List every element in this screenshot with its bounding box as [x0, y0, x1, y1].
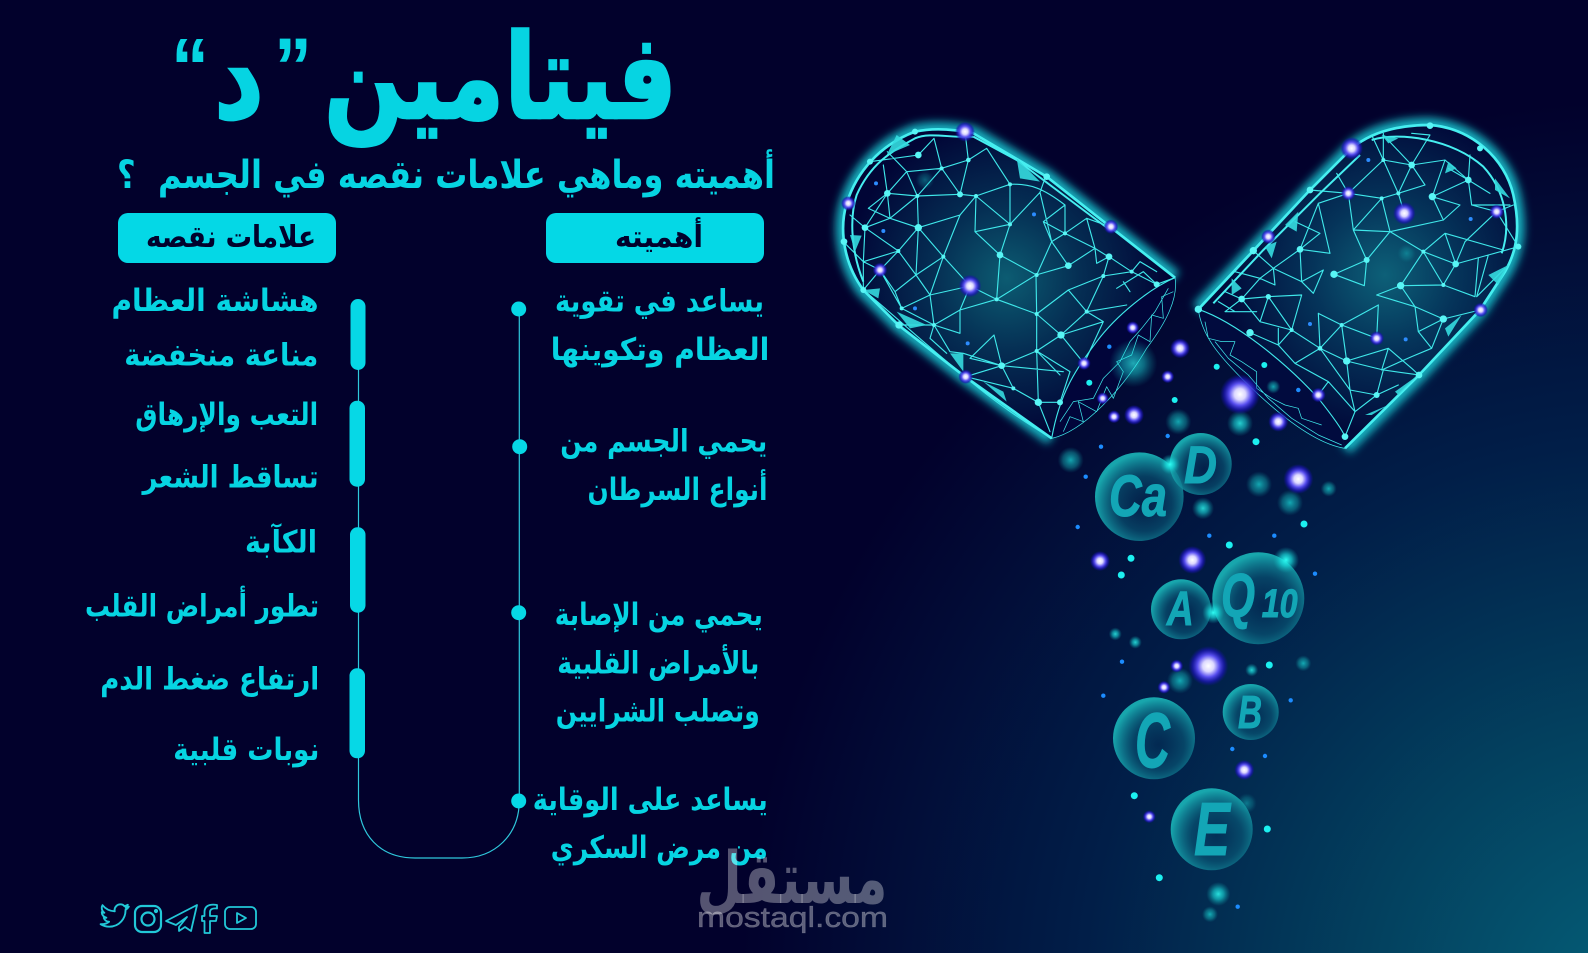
- deficiency signs list: نوبات قلبية: [173, 732, 319, 768]
- vitamin bubble: D: [1170, 433, 1232, 495]
- timeline connector: [358, 300, 527, 858]
- rim fragments: [850, 135, 1040, 402]
- capsule: right half: [1195, 122, 1521, 448]
- importance list: بالأمراض القلبية: [557, 643, 759, 681]
- vitamin bubble: B: [1223, 684, 1279, 740]
- icon: instagram: [135, 906, 161, 932]
- importance list: يساعد في تقوية: [555, 284, 764, 320]
- importance list: وتصلب الشرايين: [556, 694, 760, 730]
- button: importance: [546, 213, 764, 263]
- deficiency signs list: التعب والإرهاق: [135, 397, 318, 433]
- deficiency signs list: [85, 283, 319, 768]
- title: ”: [274, 22, 312, 113]
- capsule opening: [1198, 309, 1345, 448]
- icon: youtube: [225, 907, 256, 929]
- tiny blue dots: [1076, 344, 1317, 909]
- vitamin bubble: D: D: [1184, 436, 1217, 495]
- vitamin bubble: C: [1113, 696, 1195, 784]
- capsule rim: [1198, 125, 1517, 448]
- capsule opening: [1052, 278, 1176, 438]
- vitamin bubble: E: [1171, 787, 1253, 871]
- vitamin bubble: Q10: Q: [1221, 562, 1255, 631]
- timeline dots: [511, 302, 527, 808]
- mesh: [843, 132, 1175, 432]
- importance list: من مرض السكري: [551, 830, 768, 866]
- deficiency signs list: ارتفاع ضغط الدم: [100, 661, 319, 697]
- glowing nodes: [1261, 137, 1504, 402]
- importance list: يساعد على الوقاية: [533, 782, 768, 818]
- social icons: [101, 904, 256, 933]
- vitamin bubble: Q10: [1212, 552, 1304, 644]
- purple particles: [1090, 321, 1313, 823]
- vitamin bubble: E: E: [1194, 787, 1231, 871]
- button: deficiency signs: علامات نقصه: [146, 220, 316, 255]
- button: importance: أهميته: [615, 217, 703, 255]
- title: د: [214, 8, 264, 146]
- soft teal particles: [1058, 339, 1337, 922]
- mesh nodes: [841, 129, 1160, 406]
- deficiency signs list: تساقط الشعر: [141, 459, 318, 495]
- vitamin bubble: B: B: [1238, 686, 1262, 738]
- bright cyan dots: [1086, 362, 1308, 881]
- deficiency signs list: تطور أمراض القلب: [85, 586, 319, 625]
- bright contact glows: [1160, 454, 1299, 624]
- icon: facebook: [202, 905, 217, 933]
- title: [171, 8, 677, 147]
- vitamin bubble: A: [1151, 579, 1211, 639]
- importance list: [533, 284, 769, 866]
- mesh: [1218, 133, 1518, 437]
- button: deficiency signs: [118, 213, 336, 263]
- watermark: mostaql.com: [697, 902, 888, 934]
- title: فيتامين: [324, 8, 677, 147]
- watermark: مستقل: [696, 836, 888, 920]
- subtitle: أهميته وماهي علامات نقصه في الجسم ؟: [117, 149, 775, 198]
- glowing nodes: [841, 122, 1118, 404]
- rim fragments: [1232, 135, 1510, 415]
- deficiency signs list: مناعة منخفضة: [124, 338, 318, 374]
- icon: telegram: [166, 905, 197, 931]
- mesh nodes: [1195, 122, 1521, 440]
- vitamin bubble: Ca: Ca: [1109, 464, 1167, 529]
- capsule: left half: [841, 122, 1176, 438]
- icon: twitter: [101, 904, 129, 927]
- capsule rim: [843, 129, 1175, 438]
- timeline thick bars: [350, 299, 366, 758]
- title: “: [171, 22, 209, 113]
- vitamin bubble: Ca: [1095, 452, 1184, 541]
- vitamin bubble: Q10: 10: [1262, 582, 1298, 626]
- deficiency signs list: الكآبة: [245, 523, 317, 561]
- watermark: [696, 836, 888, 934]
- importance list: العظام وتكوينها: [551, 332, 769, 368]
- vitamin bubble: A: A: [1166, 583, 1194, 636]
- deficiency signs list: هشاشة العظام: [112, 283, 318, 319]
- importance list: أنواع السرطان: [588, 469, 768, 508]
- importance list: يحمي من الإصابة: [555, 597, 763, 633]
- vitamin bubble: C: C: [1135, 696, 1171, 784]
- importance list: يحمي الجسم من: [560, 424, 767, 460]
